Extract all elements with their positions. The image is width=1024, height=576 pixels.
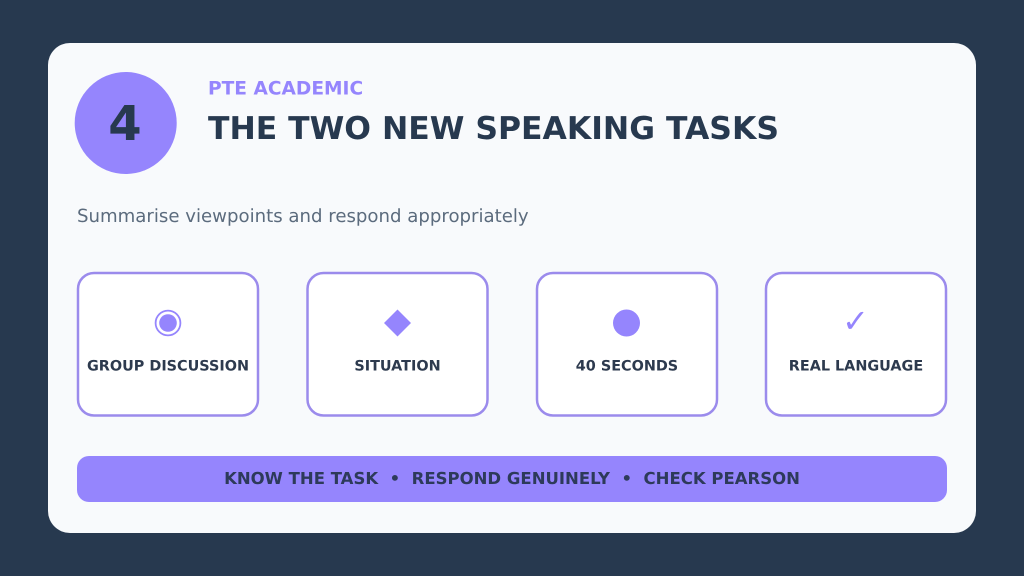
- bottom banner: [77, 456, 947, 502]
- icon: solid circle: [613, 310, 640, 336]
- subtitle: Summarise viewpoints and respond appropriately: [77, 206, 529, 227]
- icon: check mark: ✓: [842, 302, 869, 340]
- label: 40 seconds: 40 SECONDS: [576, 358, 678, 374]
- label: group discussion: GROUP DISCUSSION: [87, 358, 249, 374]
- card: group discussion: [78, 273, 258, 416]
- icon: target circle: [156, 311, 180, 335]
- number badge: 4: [108, 96, 142, 152]
- card: real language: [766, 273, 946, 416]
- label: real language: REAL LANGUAGE: [789, 358, 923, 374]
- eyebrow heading: PTE ACADEMIC: [208, 78, 363, 100]
- label: situation: SITUATION: [354, 358, 441, 374]
- title: THE TWO NEW SPEAKING TASKS: [208, 111, 779, 147]
- bottom banner: KNOW THE TASK • RESPOND GENUINELY • CHECK PEARSON: [224, 469, 800, 488]
- card: situation: [308, 273, 488, 416]
- number badge: [75, 72, 177, 174]
- icon: diamond: [384, 310, 411, 336]
- main panel: [48, 43, 976, 533]
- card: 40 seconds: [537, 273, 717, 416]
